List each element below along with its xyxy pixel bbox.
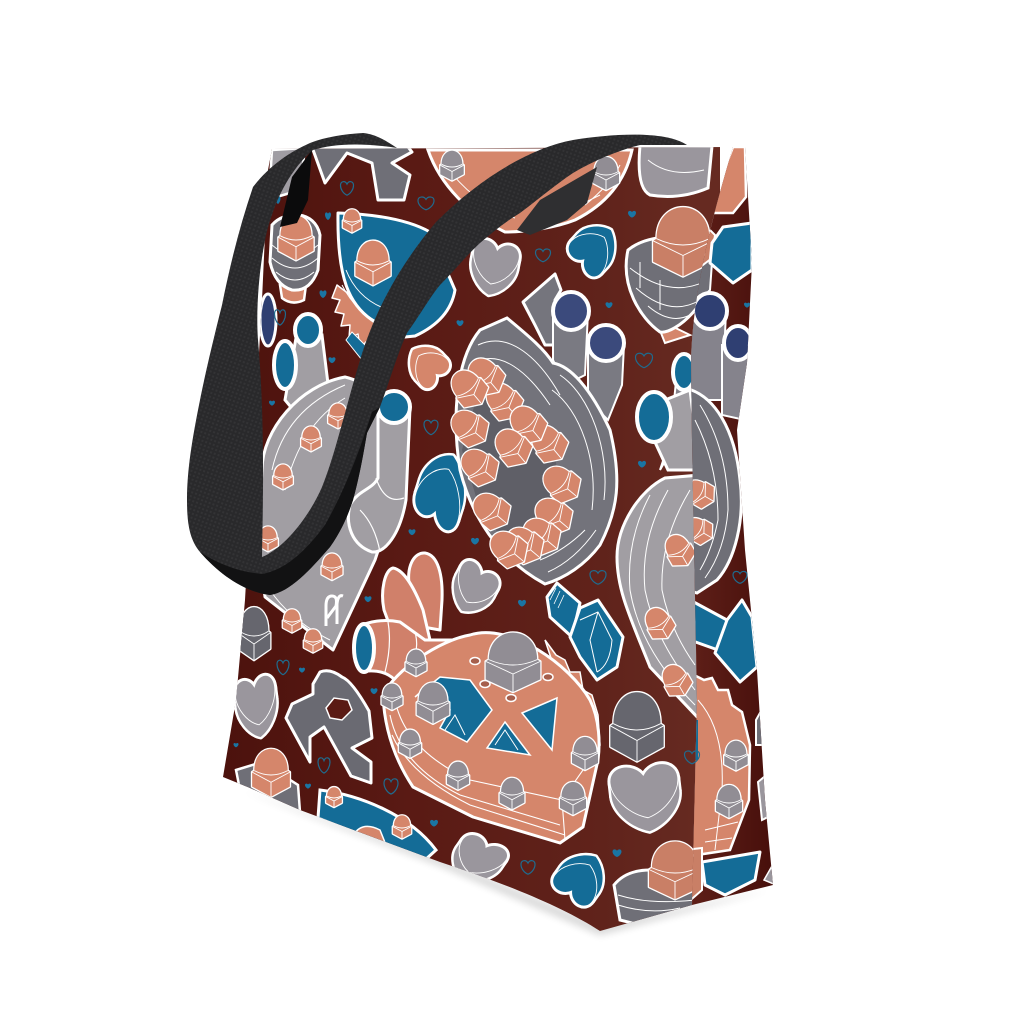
big left gray heart with pipes: [258, 314, 410, 652]
holes: [470, 658, 553, 702]
stack right: [626, 207, 713, 343]
stacked hearts top left: [270, 215, 320, 303]
cutouts: [415, 677, 492, 742]
left edge nut: [238, 607, 270, 660]
ground shadow: [240, 790, 770, 935]
logo mark: [326, 596, 343, 626]
gusset bottom stack remainder: [685, 848, 702, 905]
bottom gray heart: [451, 832, 510, 880]
wrench top: [312, 147, 412, 200]
strap underside shading: [200, 407, 380, 595]
gusset blue bolt: [690, 600, 757, 682]
handle strap: [187, 133, 687, 595]
stack bottom left: [236, 749, 300, 812]
bottom blue heart: [550, 852, 606, 909]
center heart with nut ring and pipes: [444, 274, 624, 584]
strap tab right: [517, 167, 597, 235]
blue bolt: [547, 583, 623, 680]
gusset stack and nut remainder: [690, 215, 715, 310]
gray nut bottom center: [610, 692, 664, 762]
strap tab left: [280, 150, 312, 227]
blue half heart with teeth: [332, 209, 455, 360]
pipes: [352, 552, 452, 680]
gusset blue heart: [710, 223, 752, 283]
blue heart middle: [412, 452, 466, 534]
bolts on heart: [486, 633, 540, 692]
salmon big heart: [354, 553, 600, 843]
bag front panel: [200, 130, 720, 950]
stack bottom right: [614, 842, 701, 925]
small gray heart center: [451, 558, 502, 614]
heart body: [383, 633, 599, 843]
fold part of large pipes: [617, 354, 700, 720]
gusset salmon heart: [690, 673, 750, 856]
left edge heart: [234, 673, 280, 742]
bag gusset panel: [691, 147, 773, 905]
gusset pipes and dark heart: [680, 293, 752, 593]
gusset bottom blue heart: [702, 852, 760, 895]
small gray heart: [466, 237, 521, 300]
small heart accents: [274, 182, 747, 874]
tote bag illustration: [187, 133, 773, 937]
gusset top salmon: [712, 147, 746, 213]
blue half heart bottom: [318, 787, 436, 860]
small salmon heart: [408, 344, 452, 392]
top gray heart block: [639, 146, 712, 196]
small blue heart: [566, 224, 617, 280]
wrench bottom left: [286, 671, 372, 783]
salmon top heart: [428, 150, 632, 232]
right edge pieces: [756, 695, 770, 745]
gray piece top left: [270, 148, 305, 196]
gray heart bottom center: [608, 762, 684, 835]
nut ring: [450, 357, 582, 570]
teeth: [545, 640, 600, 745]
navy pipe left edge: [260, 294, 276, 346]
